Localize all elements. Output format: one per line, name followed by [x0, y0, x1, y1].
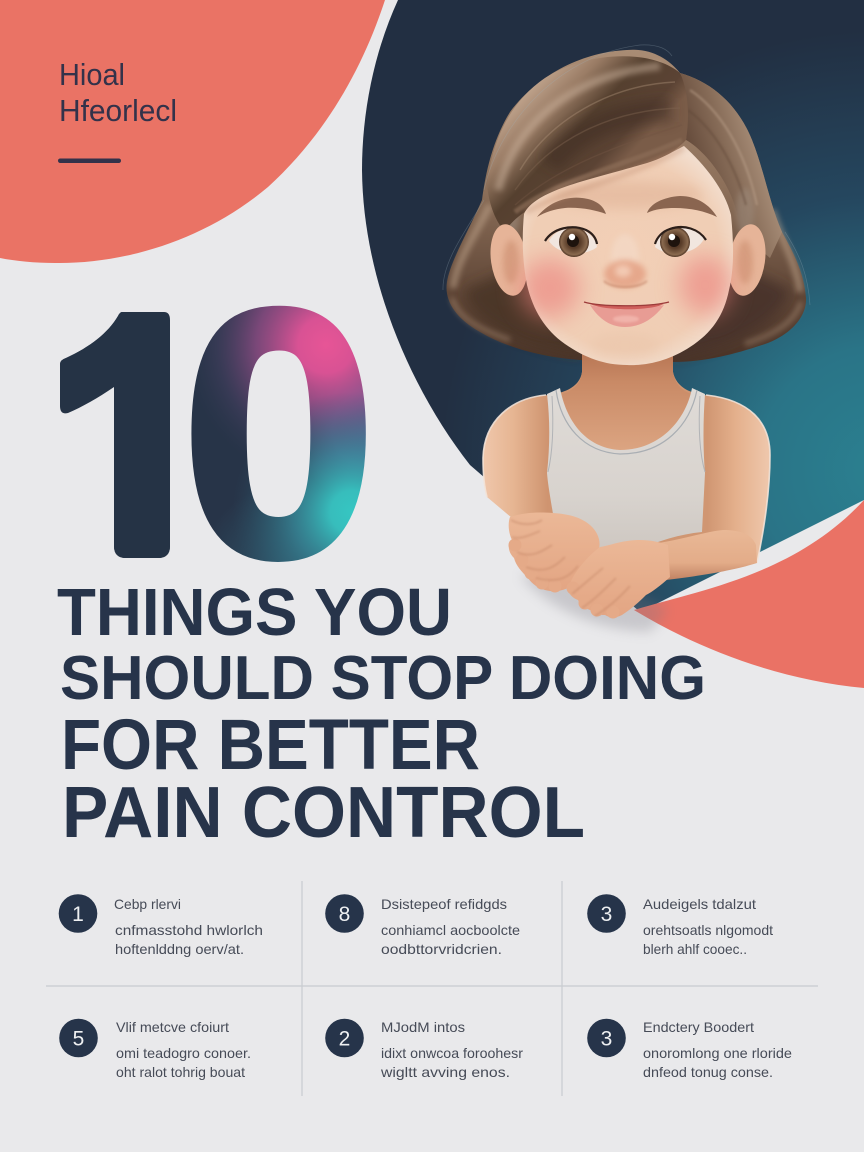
left hand: [508, 512, 600, 592]
item 1: cnfmasstohd hwlorlch: [115, 922, 263, 938]
flyaway hairs: [443, 45, 810, 305]
panel: coral top-left blob: [0, 0, 385, 263]
item 8: 8: [339, 903, 350, 926]
header brand text: [58, 57, 177, 163]
right hand: [566, 540, 670, 618]
item 1: 1: [72, 903, 84, 926]
item 3 top: Audeigels tdalzut: [643, 896, 756, 912]
item 1: Cebp rlervi: [114, 896, 181, 912]
item 8: conhiamcl aocboolcte: [381, 922, 520, 938]
item 2: 2: [339, 1028, 350, 1050]
item 5: omi teadogro conoer.: [116, 1045, 251, 1061]
shoulder rim light: [483, 395, 770, 563]
shadow of hands on page: [520, 570, 668, 632]
nose: [604, 234, 647, 288]
item 5: [59, 1019, 251, 1080]
hair back: [447, 50, 806, 362]
face: [520, 146, 733, 365]
item 5: Vlif metcve cfoiurt: [116, 1019, 229, 1035]
item 5: oht ralot tohrig bouat: [116, 1064, 245, 1080]
item 3 top: 3: [601, 903, 612, 926]
panel: dark teal curved backdrop: [362, 0, 864, 612]
right eye: [655, 227, 706, 257]
item 1: hoftenlddng oerv/at.: [115, 941, 244, 957]
illustration: girl: [443, 45, 810, 632]
eyebrows: [537, 198, 606, 217]
item 2: MJodM intos: [381, 1019, 465, 1035]
mouth: [584, 302, 669, 327]
item 5: 5: [73, 1028, 84, 1050]
item 8: Dsistepeof refidgds: [381, 896, 507, 912]
item 2: idixt onwcoa foroohesr: [381, 1045, 523, 1061]
item 2: [325, 1019, 523, 1080]
fringe shadow on forehead: [526, 148, 684, 212]
right side hair section: [501, 73, 782, 258]
torso and upper arms: [483, 345, 770, 563]
forearm: [630, 530, 757, 584]
ears: [486, 222, 770, 298]
left eye: [545, 227, 597, 257]
item 3 bottom: onoromlong one rloride: [643, 1045, 792, 1061]
item 8: [325, 894, 520, 957]
title: PAIN CONTROL: [62, 773, 585, 853]
item 3 top: [587, 894, 773, 957]
big number 10: [60, 306, 366, 562]
item 3 top: blerh ahlf cooec..: [643, 941, 747, 957]
header brand text: Hioal: [59, 57, 125, 92]
neck: [562, 345, 692, 452]
item 3 bottom: Endctery Boodert: [643, 1019, 754, 1035]
header brand text: Hfeorlecl: [59, 93, 177, 128]
title: SHOULD STOP DOING: [60, 644, 706, 713]
grid lines: [46, 881, 818, 1096]
fringe sweep: [487, 56, 688, 232]
item 3 bottom: [587, 1019, 792, 1080]
title: THINGS YOU: [57, 575, 452, 650]
item 3 bottom: 3: [601, 1028, 612, 1050]
item 2: wigltt avving enos.: [380, 1064, 510, 1080]
numeral one: 1: [30, 231, 231, 636]
title: [57, 575, 706, 853]
tank top: [547, 388, 705, 565]
title: FOR BETTER: [61, 706, 480, 785]
item 3 top: orehtsoatls nlgomodt: [643, 922, 773, 938]
numeral zero: 0: [181, 236, 377, 630]
item 8: oodbttorvridcrien.: [381, 941, 502, 957]
item 3 bottom: dnfeod tonug conse.: [643, 1064, 773, 1080]
panel: coral lower-right swoosh: [634, 500, 864, 688]
item 1: [59, 894, 263, 957]
